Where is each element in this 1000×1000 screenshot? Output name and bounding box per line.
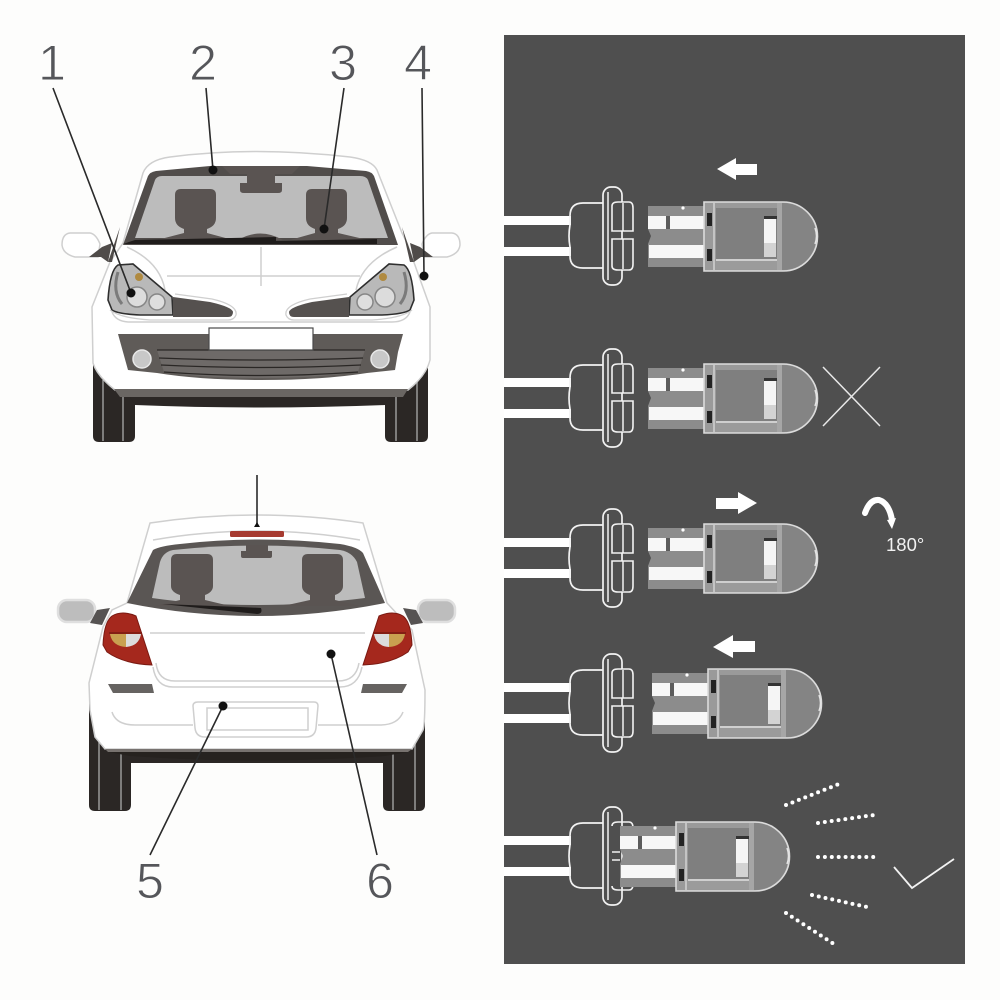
step 1: bulb and socket <box>504 187 818 285</box>
rear car body <box>89 515 425 760</box>
step 3: bulb and socket <box>504 509 818 607</box>
rear tail lights and reflectors <box>103 613 412 693</box>
front side mirrors <box>62 227 460 262</box>
rear wheels <box>89 700 425 811</box>
rear side mirrors <box>58 600 455 625</box>
rear licence plate recess <box>193 702 318 737</box>
high mounted stop light <box>230 531 284 537</box>
light rays <box>786 784 876 944</box>
step 4: bulb and socket <box>504 654 822 752</box>
front car body <box>92 152 430 408</box>
arrow: pull right <box>716 492 757 514</box>
number 1: 1 <box>38 35 66 91</box>
icon: rotate arrow <box>865 500 896 529</box>
arrow: insert left again <box>713 635 755 658</box>
arrow: insert left <box>717 158 757 180</box>
number 4: 4 <box>404 35 432 91</box>
front wheels <box>93 350 428 443</box>
number 5: 5 <box>136 853 164 909</box>
panel: rear view of car <box>58 515 455 811</box>
dark panel background <box>504 35 965 964</box>
panel: front view of car <box>62 152 460 443</box>
front licence plate <box>209 328 313 350</box>
number 3: 3 <box>329 35 357 91</box>
front grille and fog lights <box>118 334 403 380</box>
front windshield with occupants <box>123 166 398 245</box>
rotation label: 180° <box>886 534 924 555</box>
number 6: 6 <box>366 853 394 909</box>
front headlights <box>108 264 414 320</box>
leader lines with dots <box>53 88 428 855</box>
step 5: inserted bulb <box>504 807 790 905</box>
step 2: bulb and socket <box>504 349 818 447</box>
icon: cross <box>823 367 880 426</box>
number 2: 2 <box>189 35 217 91</box>
panel: bulb installation steps <box>504 35 965 964</box>
rear window with occupants <box>127 540 385 616</box>
icon: check mark <box>894 859 954 888</box>
